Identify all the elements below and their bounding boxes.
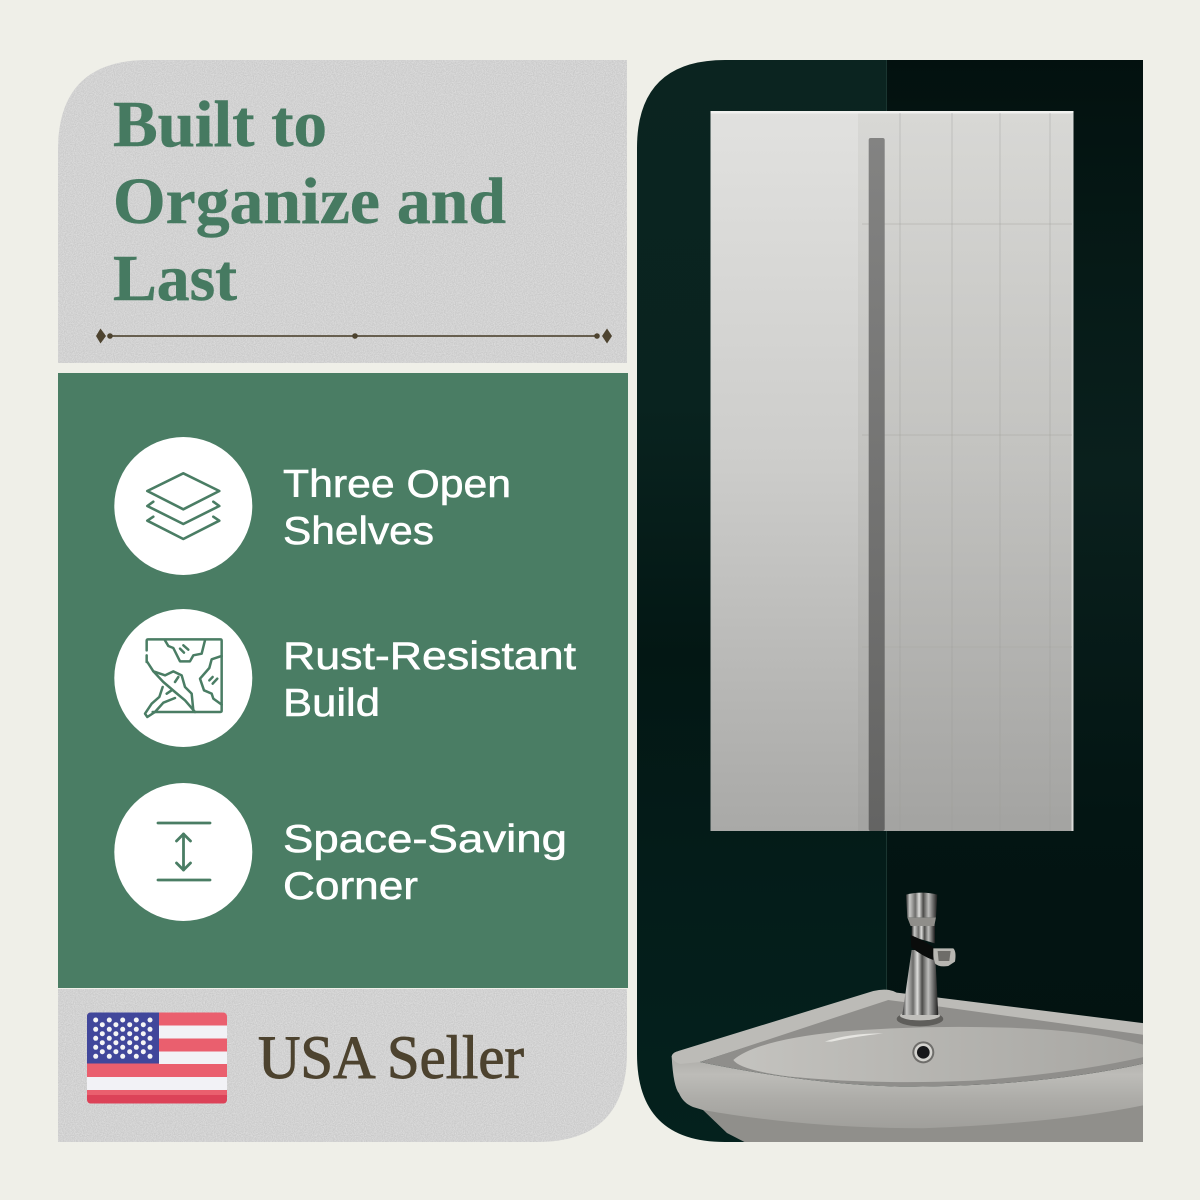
panel: features [58,373,628,988]
bowl highlight [825,1033,883,1042]
label [283,463,511,553]
title: Built to [113,88,327,161]
panel: product photo [637,60,1145,1143]
label [283,818,567,908]
corner sink [672,893,1145,1143]
basin front lip [672,1052,1145,1128]
title: Organize and [113,165,506,238]
usa seller label: USA Seller [258,1025,524,1092]
label: Rust-Resistant [283,635,576,678]
basin pedestal [702,1105,1143,1142]
icon: stacked shelves [114,437,252,575]
basin rim [672,990,1145,1064]
feature: rust-resistant build [114,609,576,747]
corner cabinet mirror [710,111,1074,831]
label: Three Open [283,463,511,506]
icon: vertical dimension arrow [114,783,252,921]
basin deck [700,1000,1145,1087]
label: Corner [283,865,418,908]
dark green wall [637,60,1143,1142]
title: Last [113,242,237,315]
label: Build [283,682,380,725]
panel: heading [58,60,627,363]
basin bowl [733,1027,1145,1082]
icon: cracked rust square [114,609,252,747]
chrome faucet [897,893,956,1026]
icon: usa flag [87,1012,227,1104]
mirror edge strip [869,138,885,831]
ornamental divider [96,328,612,344]
label [283,635,576,725]
drain overflow [912,1041,934,1063]
feature: space-saving corner [114,783,567,921]
title [113,88,506,315]
label: Space-Saving [283,818,567,861]
panel: usa seller [58,989,627,1142]
feature: three open shelves [114,437,511,575]
label: Shelves [283,510,434,553]
